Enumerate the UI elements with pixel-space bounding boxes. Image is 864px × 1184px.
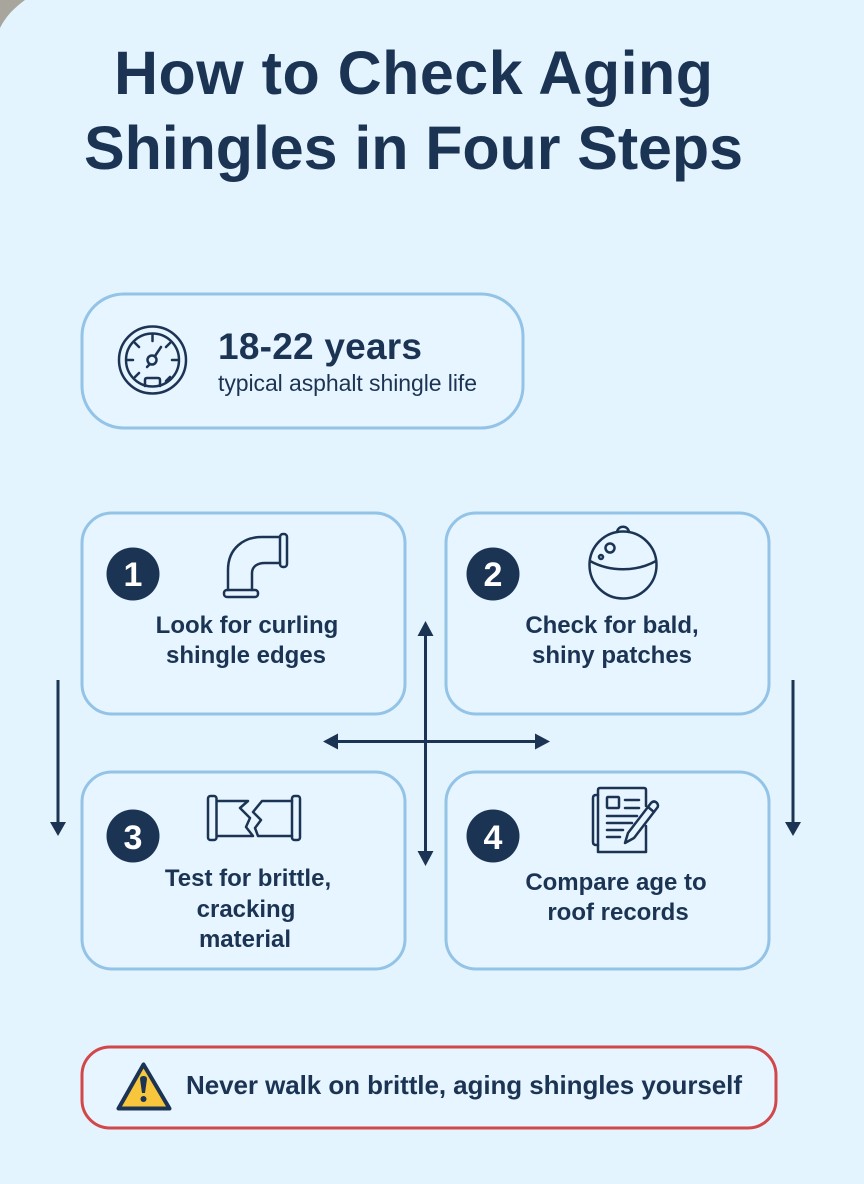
panel: step 1 (82, 513, 405, 714)
step text: Test for brittle, (165, 865, 331, 892)
arrow: center horizontal double (323, 734, 550, 750)
stat caption: typical asphalt shingle life (218, 370, 477, 396)
step text (525, 612, 699, 669)
stat value: 18-22 years (218, 326, 422, 367)
step number 4 (466, 810, 520, 862)
step text: shingle edges (166, 642, 326, 669)
arrow: right down (785, 680, 801, 836)
step number 4: 4 (484, 819, 503, 857)
step text (156, 612, 338, 669)
step text: cracking (197, 896, 295, 923)
step text: Look for curling (156, 612, 338, 639)
icon: sphere (590, 527, 656, 598)
step text: material (199, 926, 291, 953)
step number 1: 1 (124, 556, 142, 594)
arrow: left down (50, 680, 66, 836)
step number 2 (466, 548, 520, 600)
step text: Compare age to (525, 869, 707, 896)
title: Shingles in Four Steps (84, 114, 743, 182)
step text (165, 865, 331, 953)
title (84, 39, 743, 182)
step text (525, 869, 707, 926)
panel: step 4 (446, 772, 769, 969)
step text: shiny patches (532, 642, 692, 669)
icon: cracked pipe (208, 796, 300, 840)
panel: lifespan stat (82, 294, 523, 428)
title: How to Check Aging (114, 39, 713, 107)
step text: roof records (547, 899, 689, 926)
panel: warning (82, 1047, 776, 1128)
warning text: Never walk on brittle, aging shingles yourself (186, 1070, 742, 1100)
step number 3: 3 (124, 819, 142, 857)
step number 1 (106, 548, 160, 600)
arrow: center vertical double (418, 621, 434, 866)
step text: Check for bald, (525, 612, 699, 639)
icon: gauge (119, 326, 186, 394)
panel: step 3 (82, 772, 405, 969)
icon: pipe elbow (224, 534, 287, 597)
step number 2: 2 (484, 556, 502, 594)
panel: step 2 (446, 513, 769, 714)
step number 3 (106, 810, 160, 862)
icon: document and pen (593, 788, 658, 852)
icon: warning triangle (118, 1064, 170, 1108)
